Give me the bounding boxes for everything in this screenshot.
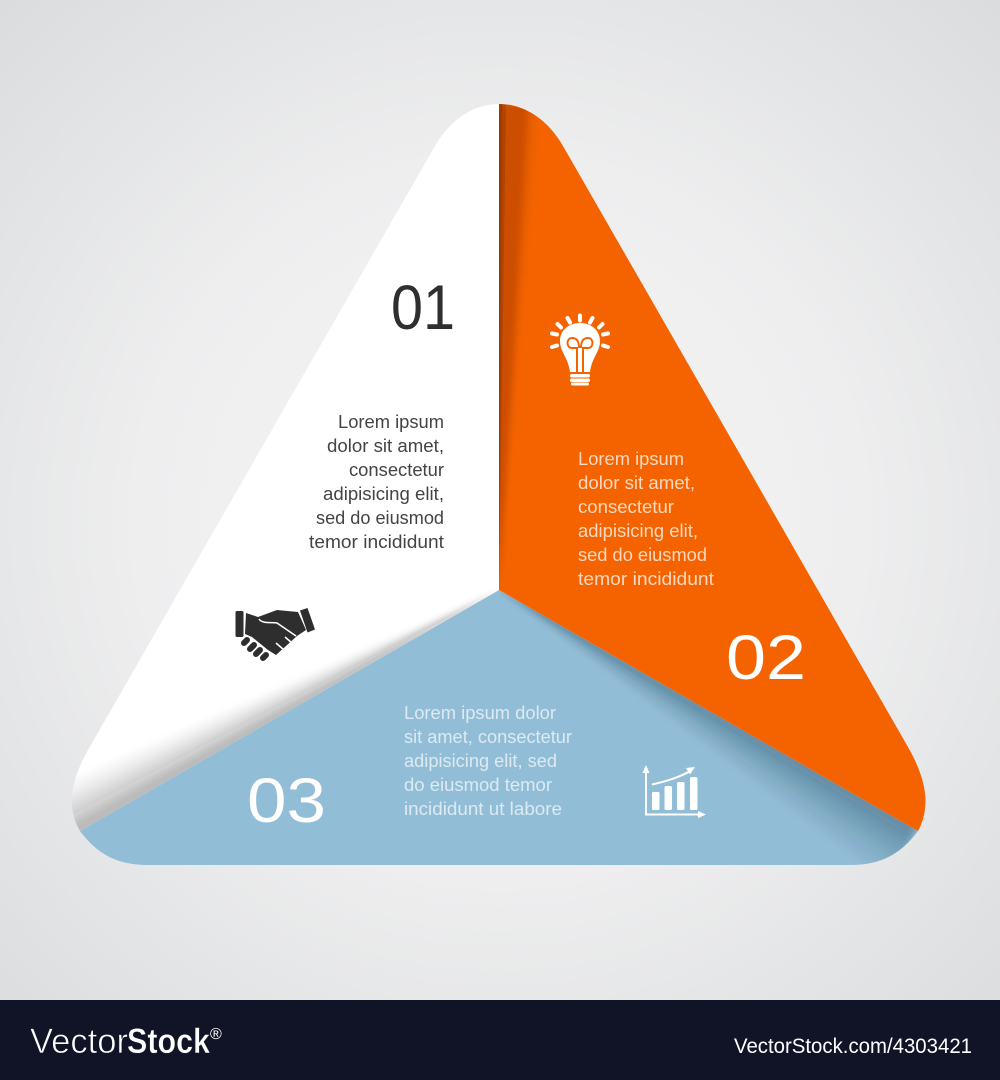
heading: 01: 01 — [391, 273, 455, 343]
text block: white panel: dolor sit amet, — [327, 436, 444, 456]
text block: white panel: Lorem ipsum — [338, 412, 444, 432]
text block: orange panel: consectetur — [578, 497, 674, 517]
heading: 02: 02 — [726, 623, 806, 693]
text block: blue panel: adipisicing elit, sed — [404, 751, 557, 771]
text block: orange panel: sed do eiusmod — [578, 545, 707, 565]
text block: orange panel: temor incididunt — [578, 569, 714, 589]
text block: white panel: consectetur — [349, 460, 444, 480]
text block: blue panel: do eiusmod temor — [404, 775, 552, 795]
text block: orange panel: dolor sit amet, — [578, 473, 695, 493]
text block: blue panel: sit amet, consectetur — [404, 727, 572, 747]
text block: blue panel: incididunt ut labore — [404, 799, 562, 819]
panel 3: blue segment — [80, 590, 930, 882]
text block: orange panel: Lorem ipsum — [578, 449, 684, 469]
icon: light bulb — [552, 316, 608, 386]
panel 2: orange segment — [485, 104, 925, 831]
banner: VectorStock footer — [0, 1000, 1000, 1080]
text block: blue panel: Lorem ipsum dolor — [404, 703, 556, 723]
text block: white panel: adipisicing elit, — [323, 484, 444, 504]
text block: white panel — [309, 412, 444, 552]
text block: orange panel: adipisicing elit, — [578, 521, 698, 541]
text block: orange panel — [578, 449, 714, 589]
image id url: VectorStock.com/4303421 — [734, 1035, 972, 1058]
logo wordmark: Stock — [127, 1022, 210, 1061]
logo wordmark — [30, 1022, 222, 1061]
heading: 03: 03 — [247, 766, 326, 836]
logo wordmark: Vector — [30, 1022, 128, 1061]
icon: bar chart — [642, 765, 706, 818]
logo wordmark: ® — [210, 1026, 222, 1043]
panel 1: white segment — [55, 104, 499, 850]
icon: handshake — [236, 608, 315, 658]
text block: white panel: sed do eiusmod — [316, 508, 444, 528]
text block: white panel: temor incididunt — [309, 532, 444, 552]
text block: blue panel — [404, 703, 572, 819]
